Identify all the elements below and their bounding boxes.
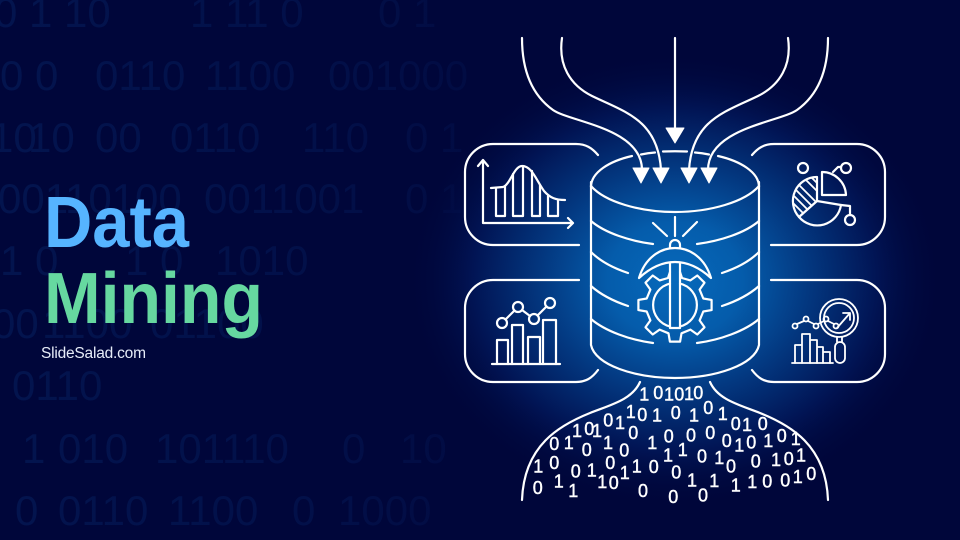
panel: top-left chart box bbox=[465, 144, 598, 245]
background binary pattern: 010 bbox=[58, 425, 128, 472]
background binary pattern: 00110100 bbox=[0, 175, 182, 222]
output binary digits: 1010101010 bbox=[626, 398, 768, 435]
output binary digits: 100101100 bbox=[533, 453, 681, 483]
brand text: SlideSalad.com bbox=[41, 345, 146, 362]
background binary pattern: 1 0 bbox=[0, 237, 58, 284]
input arrow: left bbox=[561, 38, 669, 183]
background binary pattern: 1 0 bbox=[125, 237, 183, 284]
background binary pattern: 101110 bbox=[155, 425, 289, 472]
input arrow: right bbox=[681, 38, 789, 183]
background binary pattern: 1000 bbox=[338, 487, 431, 534]
panel: bottom-left chart box bbox=[465, 280, 598, 382]
output binary digits: 010101000010101 bbox=[549, 423, 801, 460]
background binary pattern: 0 bbox=[292, 487, 315, 534]
background binary pattern: 1 bbox=[22, 425, 45, 472]
background binary pattern: 0011001 bbox=[204, 175, 364, 222]
panel: top-right chart box bbox=[752, 144, 885, 245]
background binary pattern: 0110 bbox=[95, 52, 185, 99]
output binary digits: 110100101 bbox=[663, 440, 806, 476]
icon: bell curve histogram bbox=[478, 160, 573, 228]
output funnel shoulders bbox=[522, 382, 828, 500]
background binary pattern: 001000 bbox=[328, 52, 468, 99]
background binary pattern: 0 bbox=[15, 487, 38, 534]
icon: pie chart bbox=[792, 162, 856, 226]
background binary pattern: 0 1 1 bbox=[405, 175, 498, 222]
input arrow: centre bbox=[666, 38, 684, 143]
background binary pattern: 1010 bbox=[215, 237, 308, 284]
data mining diagram bbox=[465, 38, 885, 500]
background binary pattern bbox=[0, 0, 498, 534]
background binary pattern: 110 bbox=[302, 114, 369, 161]
central blue glow bbox=[400, 0, 950, 540]
icon: bar and line chart bbox=[492, 298, 560, 364]
background binary pattern: 10 bbox=[28, 114, 75, 161]
background binary pattern: 0 1 bbox=[405, 114, 463, 161]
input arrow: far left bbox=[522, 38, 649, 183]
background binary pattern: 1100 bbox=[42, 300, 132, 347]
background binary pattern: 0110 bbox=[58, 487, 148, 534]
output binary digits bbox=[533, 383, 816, 507]
output binary digits: 0111000101110010 bbox=[533, 464, 816, 507]
background binary pattern: 01100 bbox=[150, 300, 264, 347]
background binary pattern: 1100 bbox=[205, 52, 295, 99]
title: Mining: Mining bbox=[44, 259, 263, 339]
title: Data: Data bbox=[44, 183, 190, 263]
background binary pattern: 0110 bbox=[12, 362, 102, 409]
background binary pattern: 00 bbox=[95, 114, 142, 161]
background binary pattern: 0 0 bbox=[0, 52, 58, 99]
background binary pattern: 1100 bbox=[168, 487, 258, 534]
input arrow: far right bbox=[701, 38, 828, 183]
icon: magnifier analytics bbox=[792, 299, 858, 363]
output binary digits: 011010 bbox=[572, 410, 638, 443]
background binary pattern: 0110 bbox=[170, 114, 260, 161]
panel: bottom-right chart box bbox=[752, 280, 885, 382]
background binary pattern: 0 bbox=[342, 425, 365, 472]
icon: pickaxe and gear bbox=[638, 217, 712, 342]
database cylinder bbox=[591, 151, 759, 378]
background binary pattern: 10 bbox=[400, 425, 447, 472]
output binary digits: 101010 bbox=[639, 383, 703, 404]
